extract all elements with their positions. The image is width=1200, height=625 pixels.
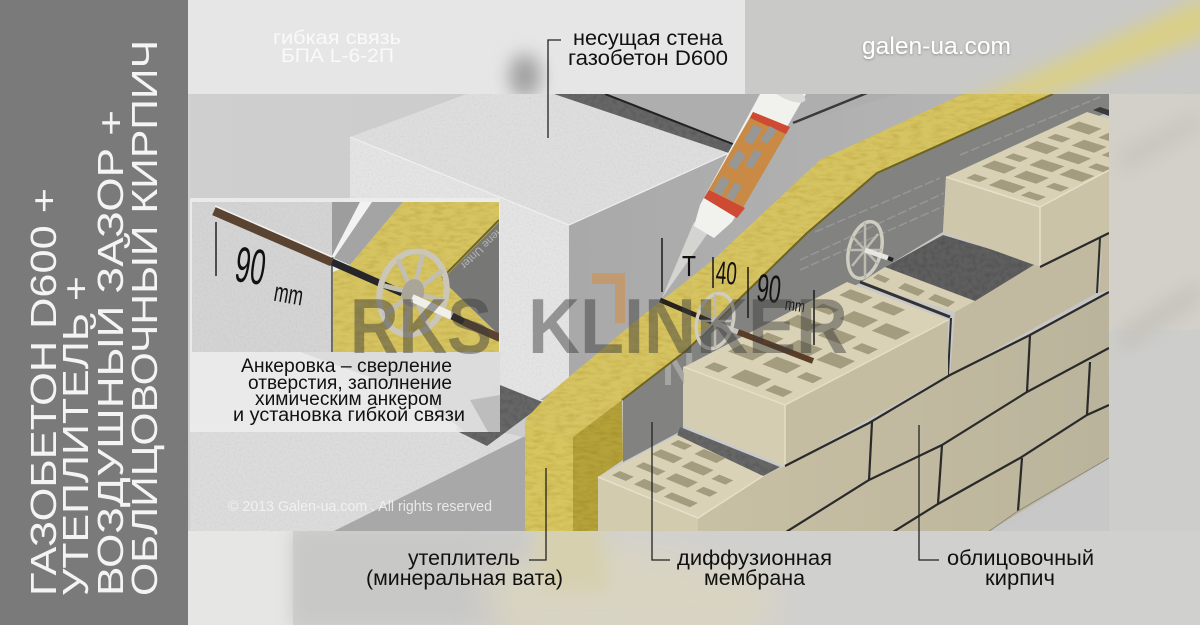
label: load-bearing wall: несущая стена	[573, 27, 723, 50]
dimension marks: 90	[755, 267, 783, 312]
label: flexible tie: БПА L-6-2П	[281, 46, 394, 67]
watermark text	[350, 282, 848, 370]
back grey wall	[608, 94, 962, 143]
inset photo	[192, 202, 506, 352]
title line: воздушный зазор: ВОЗДУШНЫЙ ЗАЗОР +	[89, 110, 131, 596]
bottom brick	[598, 435, 763, 532]
aerated concrete block	[350, 94, 796, 402]
dimension marks: T	[682, 251, 696, 283]
left title panel	[0, 0, 188, 625]
dimension marks: mm	[784, 295, 806, 316]
bottom brick top mortar	[677, 427, 780, 476]
inset washer	[376, 248, 450, 338]
mineral wool insulation	[525, 94, 1053, 532]
label: diffusion membrane	[652, 422, 832, 590]
middle brick	[683, 282, 948, 466]
inset: anchoring detail	[190, 198, 506, 432]
label: diffusion membrane: мембрана	[704, 566, 805, 590]
label: flexible tie: гибкая связь	[273, 28, 401, 49]
site name: galen-ua.com	[862, 33, 1011, 60]
membrane	[623, 94, 1109, 462]
brick joints	[785, 233, 1109, 532]
title line: утеплитель: УТЕПЛИТЕЛЬ +	[55, 276, 96, 596]
label: load-bearing wall	[548, 27, 728, 138]
sealant tube	[662, 77, 808, 298]
watermark text: KLINKER	[528, 282, 848, 370]
label: insulation: (минеральная вата)	[366, 566, 563, 590]
inset caption: химическим анкером	[255, 389, 442, 410]
label: insulation: утеплитель	[408, 546, 520, 570]
label: load-bearing wall: газобетон D600	[568, 47, 728, 70]
watermark orange mark	[592, 273, 625, 323]
mortar bed	[885, 235, 1037, 301]
title line: газобетон: ГАЗОБЕТОН D600 +	[23, 188, 64, 596]
mortar lower left	[459, 385, 542, 446]
inset caption	[233, 356, 465, 426]
dark joint on back wall	[793, 93, 867, 123]
inset dimension: mm	[272, 277, 306, 311]
inset dimension	[216, 222, 306, 311]
label: facing brick	[919, 425, 1094, 590]
watermark text: RKS	[350, 282, 492, 370]
brick wall faces	[598, 107, 1109, 531]
upper back brick strip	[860, 233, 1109, 375]
inset caption: Анкеровка – сверление	[241, 356, 452, 377]
dimension marks	[662, 238, 814, 345]
label: insulation	[366, 468, 563, 590]
label: facing brick: кирпич	[985, 566, 1055, 590]
mortar strip on block	[554, 94, 743, 153]
title line: облицовочный кирпич: ОБЛИЦОВОЧНЫЙ КИРПИЧ	[123, 40, 165, 596]
inset caption: отверстия, заполнение	[248, 373, 452, 394]
top brick	[943, 112, 1109, 267]
main anchor rod and washers	[660, 218, 893, 361]
lower block	[190, 425, 530, 531]
membrane print letters: N	[662, 343, 695, 395]
label: flexible tie	[273, 28, 401, 67]
wall construction illustration	[190, 94, 1109, 531]
inset caption: и установка гибкой связи	[233, 405, 465, 426]
inset dimension: 90	[232, 236, 269, 296]
dimension marks: 40	[715, 254, 738, 292]
inset photo: Hene Unter	[457, 223, 506, 271]
label: facing brick: облицовочный	[947, 546, 1094, 570]
copyright: © 2013 Galen-ua.com . All rights reserved	[228, 499, 492, 515]
inset rod	[214, 211, 332, 262]
label: diffusion membrane: диффузионная	[677, 546, 832, 570]
